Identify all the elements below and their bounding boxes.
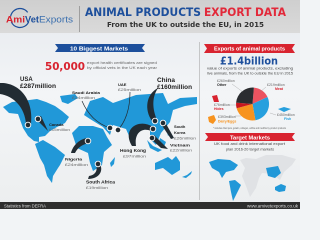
label: UAE [118, 82, 141, 92]
pie label: Other: Other [217, 83, 227, 87]
label: Vietnam [170, 142, 192, 152]
arrow: South Africa [88, 164, 101, 179]
pie label: Meat: £219million [267, 83, 285, 87]
pie chart [236, 88, 269, 120]
target markets map [209, 155, 296, 201]
label: South Africa [86, 180, 116, 190]
arrow: UAE [118, 92, 130, 130]
banner: Target Markets: Target Markets [230, 136, 270, 142]
continent: islands of South-East Asia [147, 128, 170, 152]
source note: Statistics from DEFRA [4, 204, 46, 208]
arrow: Canada [35, 116, 48, 131]
label: South Korea: South [174, 124, 186, 129]
pie label: Hides: Hides [214, 107, 224, 111]
label: Nigeria: £24million [65, 162, 88, 167]
banner: Exports of animal products: Exports of animal products [214, 46, 285, 52]
target markets description [214, 142, 286, 152]
target markets description: UK food and drink international export [214, 142, 286, 146]
pie label: Fish: £450million [277, 113, 295, 117]
continent: Greenland fragment [60, 94, 78, 104]
label: China [157, 78, 192, 91]
highlight: China [266, 166, 281, 178]
stat: £1.4billion: £1.4billion [220, 56, 278, 68]
label: Saudi Arabia: £24million [72, 95, 95, 100]
logo: AmiVetExports: Exports [39, 14, 73, 26]
arrow: South Korea [161, 122, 174, 139]
column divider [198, 42, 201, 200]
label: South Africa: South Africa [86, 180, 116, 184]
label: USA [20, 77, 56, 90]
stat: 50,000 certificates: 50,000 [45, 61, 85, 73]
stat: 50,000 certificates: by official vets in the UK each year [87, 66, 158, 70]
continent: Africa [72, 126, 112, 171]
world map [3, 93, 197, 183]
label: Saudi Arabia: Saudi Arabia [72, 90, 101, 95]
arrow: Vietnam [150, 135, 168, 149]
logo: AmiVetExports: Ami [6, 14, 25, 26]
arrow: China [147, 88, 158, 121]
footer [0, 202, 300, 209]
label: Hong Kong: Hong Kong [120, 148, 146, 153]
label: Canada: Canada [49, 122, 64, 127]
continent: Australia [155, 156, 180, 175]
label: Canada: £15million [49, 127, 70, 132]
label: South Korea: £26million [174, 136, 196, 140]
pie label: Other: £260million [217, 79, 235, 83]
pie label: Meat: Meat [275, 87, 284, 91]
arrow: Hong Kong [129, 124, 153, 146]
highlight: South America [229, 180, 241, 201]
pie label: Dairy / eggs: £393million [218, 115, 236, 119]
description [207, 66, 293, 76]
pie label: Other [217, 79, 243, 92]
banner: 10 Biggest Markets: 10 Biggest Markets [70, 46, 128, 52]
arrow: Nigeria [71, 138, 90, 153]
swooshes to markets [0, 83, 174, 179]
label: USA: USA [20, 77, 33, 83]
continent: North America [3, 99, 69, 142]
continent: Madagascar [110, 157, 115, 167]
label: Hong Kong [120, 148, 146, 158]
stat: 50,000 certificates [45, 61, 158, 73]
continent: Eurasia [84, 93, 197, 145]
pie label: Fish [270, 107, 295, 121]
label: South Africa: £19million [86, 185, 108, 190]
label: USA: £287million [20, 84, 56, 90]
description: value of exports of animal products, excluding [207, 66, 293, 70]
label: South Korea [174, 124, 196, 140]
highlight: North America [209, 159, 238, 178]
logo: AmiVetExports: Vet [25, 14, 40, 26]
title: EXPORT DATA [204, 5, 286, 19]
label: UAE: UAE [118, 82, 127, 87]
subtitle: From the UK to outside the EU, in 2015 [107, 21, 264, 29]
continent: New Zealand [182, 171, 192, 178]
label: Vietnam: Vietnam [170, 142, 191, 148]
logo: AmiVetExports [6, 7, 73, 29]
pie label: Hides [212, 95, 236, 111]
pie label: Hides: £76million [214, 103, 230, 107]
label: Nigeria: Nigeria [65, 156, 83, 162]
continent: South America [35, 140, 65, 183]
highlight: Australia [275, 184, 286, 192]
label: Canada [49, 122, 70, 132]
label: South Korea: Korea [174, 130, 186, 135]
target markets description: plan 2016-20 target markets [226, 148, 274, 152]
banner: 10 Biggest Markets [55, 44, 145, 52]
title [85, 5, 286, 19]
label: Saudi Arabia [72, 90, 101, 100]
label: China: £160million [157, 85, 192, 91]
arrow: Saudi Arabia [82, 101, 110, 128]
pie label: Dairy / eggs [208, 115, 241, 124]
arrow: USA [0, 83, 31, 124]
banner: Target Markets [205, 133, 295, 142]
description: live animals, from the UK to outside the EU in 2015 [207, 72, 293, 76]
label: UAE: £25million [118, 87, 141, 92]
label: Vietnam: £22million [170, 148, 192, 152]
base: rest of world [240, 155, 296, 197]
title: ANIMAL PRODUCTS [85, 5, 201, 19]
stat: 50,000 certificates: export health certificates are signed [87, 61, 157, 65]
pie label: Dairy / eggs: Dairy/Eggs [218, 120, 236, 124]
label: Hong Kong: £97million [123, 154, 146, 158]
header band [0, 0, 300, 33]
label: China: China [157, 78, 176, 84]
banner: Exports of animal products [204, 44, 295, 53]
pie label: Fish: Fish [284, 117, 291, 121]
map pins [25, 116, 166, 167]
label: Nigeria [65, 156, 88, 167]
pie label: Meat [260, 83, 285, 92]
website: www.amivetexports.co.uk [247, 204, 299, 208]
